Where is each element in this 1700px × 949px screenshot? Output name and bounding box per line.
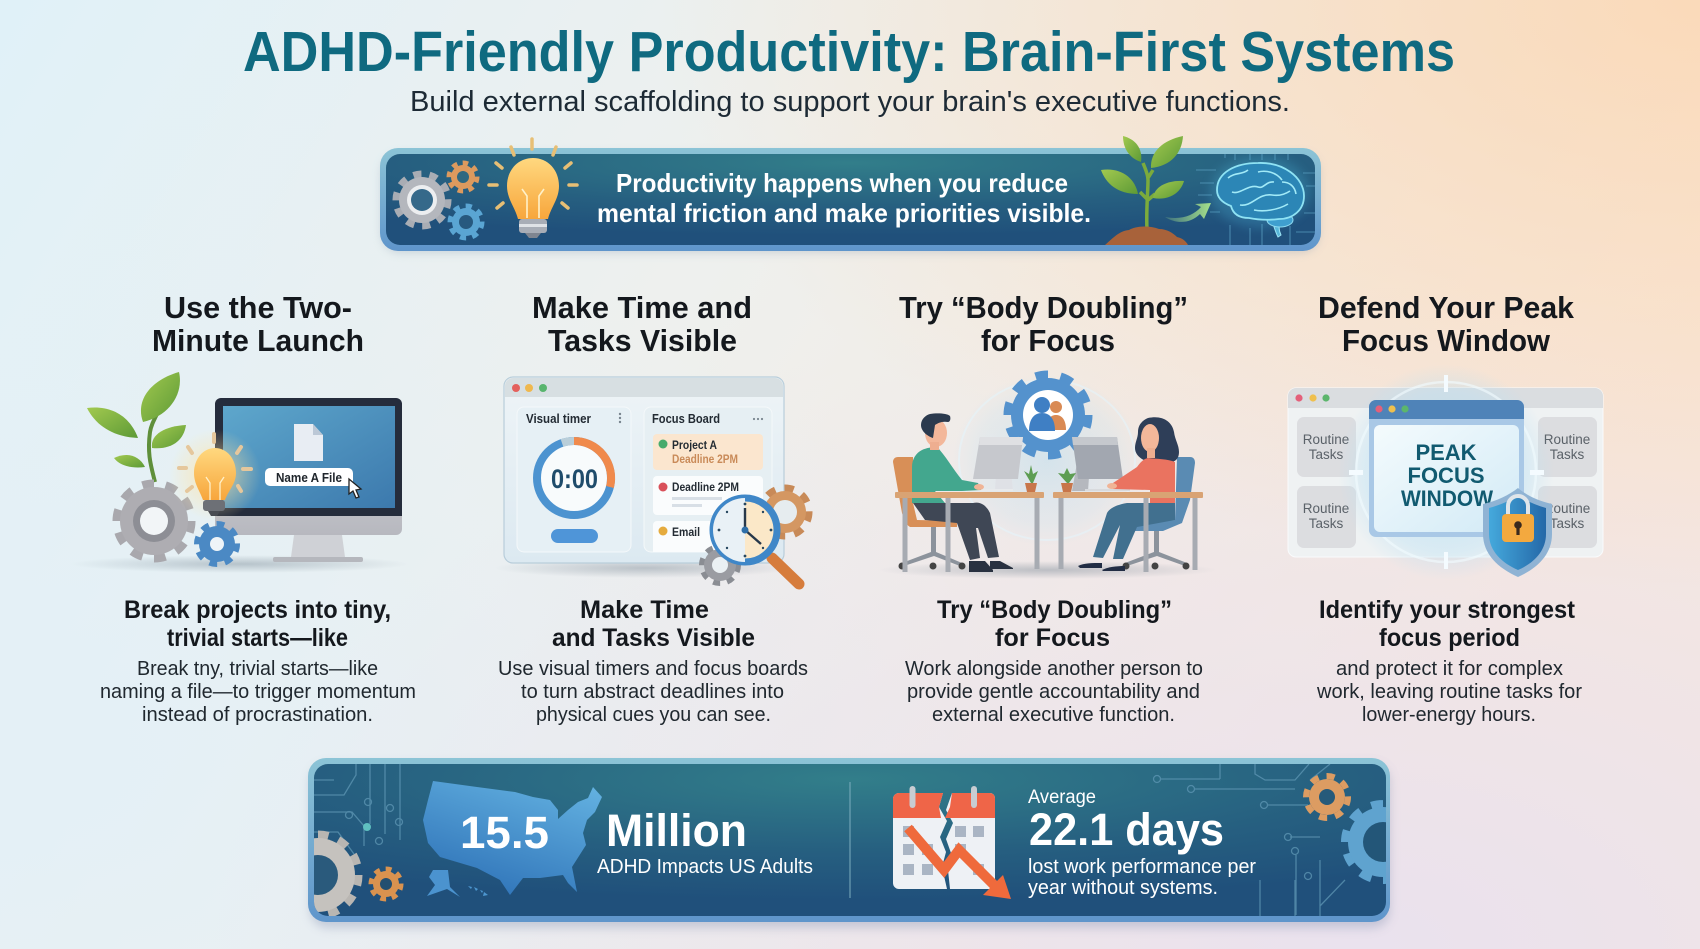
- panel: time and tasks visible: [495, 290, 809, 726]
- illustration: computer, bulb, gears and plant: [70, 372, 410, 573]
- subheading: and Tasks Visible: [552, 624, 755, 652]
- statistic: 15.5 million: 15.5: [460, 807, 549, 858]
- subheading: [937, 596, 1172, 652]
- icon: growth arrow: [1165, 203, 1211, 222]
- monitor: [215, 398, 402, 562]
- routine tasks window: Routine: [1544, 432, 1590, 447]
- visual timer card: 0:00: [551, 464, 598, 494]
- body text: [100, 658, 416, 726]
- panel: two-minute launch: [70, 290, 416, 726]
- focus board card: [644, 407, 772, 552]
- icon: broken calendar with falling arrow: [893, 786, 1011, 899]
- panel: bottom statistics banner: [278, 758, 1421, 928]
- monitor: Name A File: [276, 471, 342, 485]
- heading: Make Time and: [532, 290, 752, 325]
- heading: Try “Body Doubling”: [899, 290, 1188, 325]
- heading: [899, 290, 1188, 358]
- subheading: [552, 596, 755, 652]
- routine tasks window: Routine: [1303, 432, 1349, 447]
- monitors and plants: [973, 437, 1130, 492]
- peak focus window: WINDOW: [1401, 486, 1493, 511]
- heading: [1318, 290, 1575, 358]
- illustration: app window with timer and focus board: [495, 377, 809, 584]
- body text: [498, 658, 808, 726]
- routine tasks window: Tasks: [1309, 516, 1344, 531]
- subheading: [1319, 596, 1576, 652]
- heading: Minute Launch: [152, 323, 364, 358]
- panel: top banner: [380, 136, 1321, 252]
- heading: Tasks Visible: [548, 323, 737, 358]
- heading: Use the Two-: [164, 290, 352, 325]
- icon: gears: [396, 163, 482, 238]
- visual timer card: [517, 407, 631, 552]
- statistic: 15.5 million: ADHD Impacts US Adults: [597, 856, 813, 878]
- body text: [1316, 658, 1582, 726]
- statistic: 22.1 days: year without systems.: [1028, 877, 1218, 899]
- peak focus window: [1369, 400, 1524, 537]
- subheading: focus period: [1379, 624, 1520, 652]
- focus board card: Email: [672, 525, 700, 539]
- body text: to turn abstract deadlines into: [521, 681, 784, 703]
- statistic: 22.1 days: [1028, 787, 1256, 899]
- statistic: 22.1 days: lost work performance per: [1028, 856, 1256, 878]
- subheading: Break projects into tiny,: [124, 596, 391, 624]
- heading: Focus Window: [1342, 323, 1551, 358]
- statistic: 15.5 million: [460, 805, 813, 878]
- icon: clock magnifier with gears: [702, 488, 809, 584]
- body text: instead of procrastination.: [142, 704, 373, 726]
- visual timer card: Visual timer: [526, 411, 591, 426]
- focus board card: Project A: [672, 438, 717, 452]
- icon: light bulb: [489, 139, 577, 238]
- body text: Work alongside another person to: [905, 658, 1203, 680]
- bulb: [169, 429, 261, 521]
- body text: Break tny, trivial starts—like: [137, 658, 378, 680]
- routine tasks window: Tasks: [1550, 516, 1585, 531]
- subheading: Make Time: [580, 596, 709, 624]
- body text: lower-energy hours.: [1362, 704, 1536, 726]
- panel: peak focus window: [1288, 290, 1603, 726]
- heading: [532, 290, 752, 358]
- heading: [152, 290, 364, 358]
- icon: shield with lock: [1483, 488, 1552, 577]
- panel: body doubling: [877, 290, 1217, 726]
- gear: [117, 484, 237, 564]
- heading: Defend Your Peak: [1318, 290, 1575, 325]
- subheading: Try “Body Doubling”: [937, 596, 1172, 624]
- illustration: two people working side by side: [877, 374, 1217, 579]
- focus board card: Focus Board: [652, 411, 720, 426]
- peak focus window: PEAK: [1415, 440, 1477, 465]
- man: [893, 413, 1013, 572]
- desks: [895, 492, 1203, 572]
- body text: [905, 658, 1203, 726]
- plant: [87, 372, 186, 482]
- routine tasks window: Tasks: [1550, 447, 1585, 462]
- routine tasks window: Routine: [1544, 501, 1590, 516]
- title: ADHD-Friendly Productivity: Brain-First Systems: [243, 20, 1455, 84]
- routine tasks window: Tasks: [1309, 447, 1344, 462]
- body text: physical cues you can see.: [536, 704, 771, 726]
- statistic: 15.5 million: Million: [606, 805, 747, 856]
- subheading: Identify your strongest: [1319, 596, 1576, 624]
- body text: work, leaving routine tasks for: [1316, 681, 1582, 703]
- statistic: 22.1 days: Average: [1028, 787, 1096, 808]
- body text: and protect it for complex: [1336, 658, 1563, 680]
- focus glow: [1338, 364, 1554, 580]
- woman: [1078, 417, 1195, 571]
- subheading: [124, 596, 391, 652]
- routine tasks window: [1288, 388, 1603, 557]
- gear with people icon: [1008, 375, 1088, 455]
- icon: US map: [423, 781, 602, 897]
- body text: Use visual timers and focus boards: [498, 658, 808, 680]
- peak focus window: FOCUS: [1408, 463, 1484, 488]
- focus board card: Deadline 2PM: [672, 480, 739, 494]
- statistic: 22.1 days: 22.1 days: [1029, 804, 1224, 855]
- decorative circuits and gears: [278, 763, 1421, 916]
- focus board card: Deadline 2PM: [672, 452, 738, 466]
- banner text: Productivity happens when you reduce: [616, 168, 1068, 198]
- illustration: protected focus window: [1288, 364, 1603, 580]
- body text: external executive function.: [932, 704, 1175, 726]
- heading: for Focus: [981, 323, 1115, 358]
- subtitle: Build external scaffolding to support your brain's executive functions.: [410, 86, 1290, 118]
- icon: brain with circuits: [1196, 154, 1315, 245]
- routine tasks window: Routine: [1303, 501, 1349, 516]
- icon: sprout: [1101, 136, 1188, 245]
- body text: provide gentle accountability and: [907, 681, 1200, 703]
- banner text: [597, 168, 1091, 228]
- banner text: mental friction and make priorities visible.: [597, 198, 1091, 228]
- subheading: for Focus: [995, 624, 1110, 652]
- body text: naming a file—to trigger momentum: [100, 681, 416, 703]
- subheading: trivial starts—like: [167, 624, 348, 652]
